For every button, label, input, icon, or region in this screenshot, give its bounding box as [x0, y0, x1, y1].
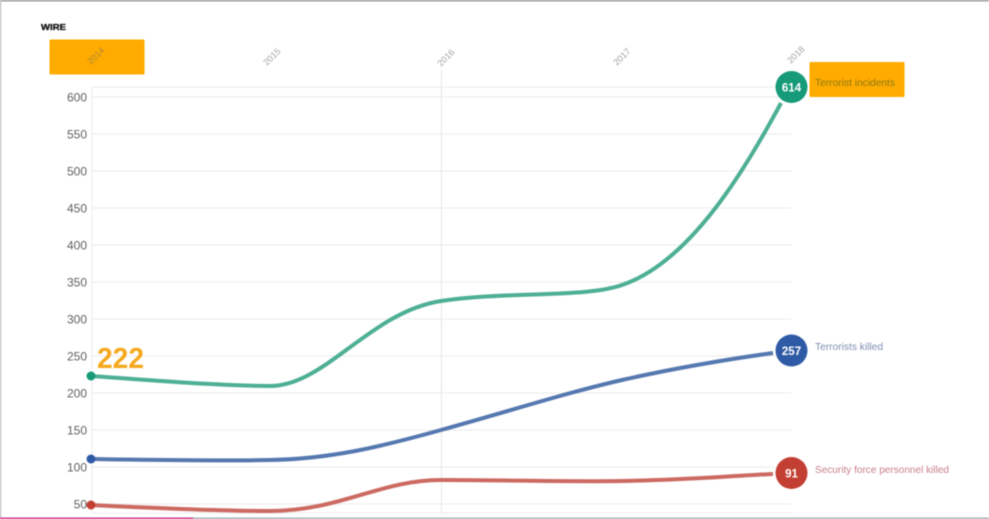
x axis year labels: 2017	[611, 46, 633, 67]
vertical marker line at 2016	[440, 70, 442, 513]
y axis labels: 150	[67, 423, 87, 437]
y axis labels: 500	[67, 164, 87, 178]
marker: 91	[776, 457, 808, 489]
y axis labels: 200	[67, 386, 87, 400]
y axis labels: 450	[67, 201, 87, 215]
y axis labels: 600	[67, 90, 87, 104]
marker: 257: 257	[782, 346, 801, 358]
y axis labels: 250	[67, 349, 87, 363]
y axis labels: 100	[67, 460, 87, 474]
x axis year labels: 2014	[85, 45, 107, 66]
x axis year labels: 2016	[435, 47, 457, 68]
y axis labels: 50	[74, 497, 87, 511]
x axis year labels	[85, 44, 807, 68]
y axis labels: 550	[67, 127, 87, 141]
y axis labels	[67, 90, 87, 511]
series label: security force personnel killed: Security force personnel killed	[815, 465, 949, 476]
highlight box over 2014	[50, 40, 144, 74]
series label: terrorists killed: Terrorists killed	[815, 342, 883, 353]
highlight box behind series label	[810, 62, 904, 97]
brand logo text: WIRE	[41, 22, 66, 32]
y axis labels: 300	[67, 312, 87, 326]
bottom progress bar	[0, 518, 989, 519]
line: terrorists killed	[86, 334, 808, 464]
grid lines	[92, 87, 791, 513]
marker: 614	[776, 71, 808, 103]
line: security force personnel killed	[86, 457, 808, 511]
y axis labels: 400	[67, 238, 87, 252]
marker: 257	[776, 334, 808, 366]
line: terrorist incidents	[86, 71, 808, 386]
marker: 614: 614	[782, 82, 802, 94]
marker: 91: 91	[785, 468, 798, 480]
x axis year labels: 2018	[785, 44, 807, 65]
series label: terrorist incidents: Terrorist incidents	[815, 78, 895, 89]
x axis year labels: 2015	[261, 46, 283, 67]
y axis labels: 350	[67, 275, 87, 289]
callout value 222: 222	[97, 343, 144, 375]
